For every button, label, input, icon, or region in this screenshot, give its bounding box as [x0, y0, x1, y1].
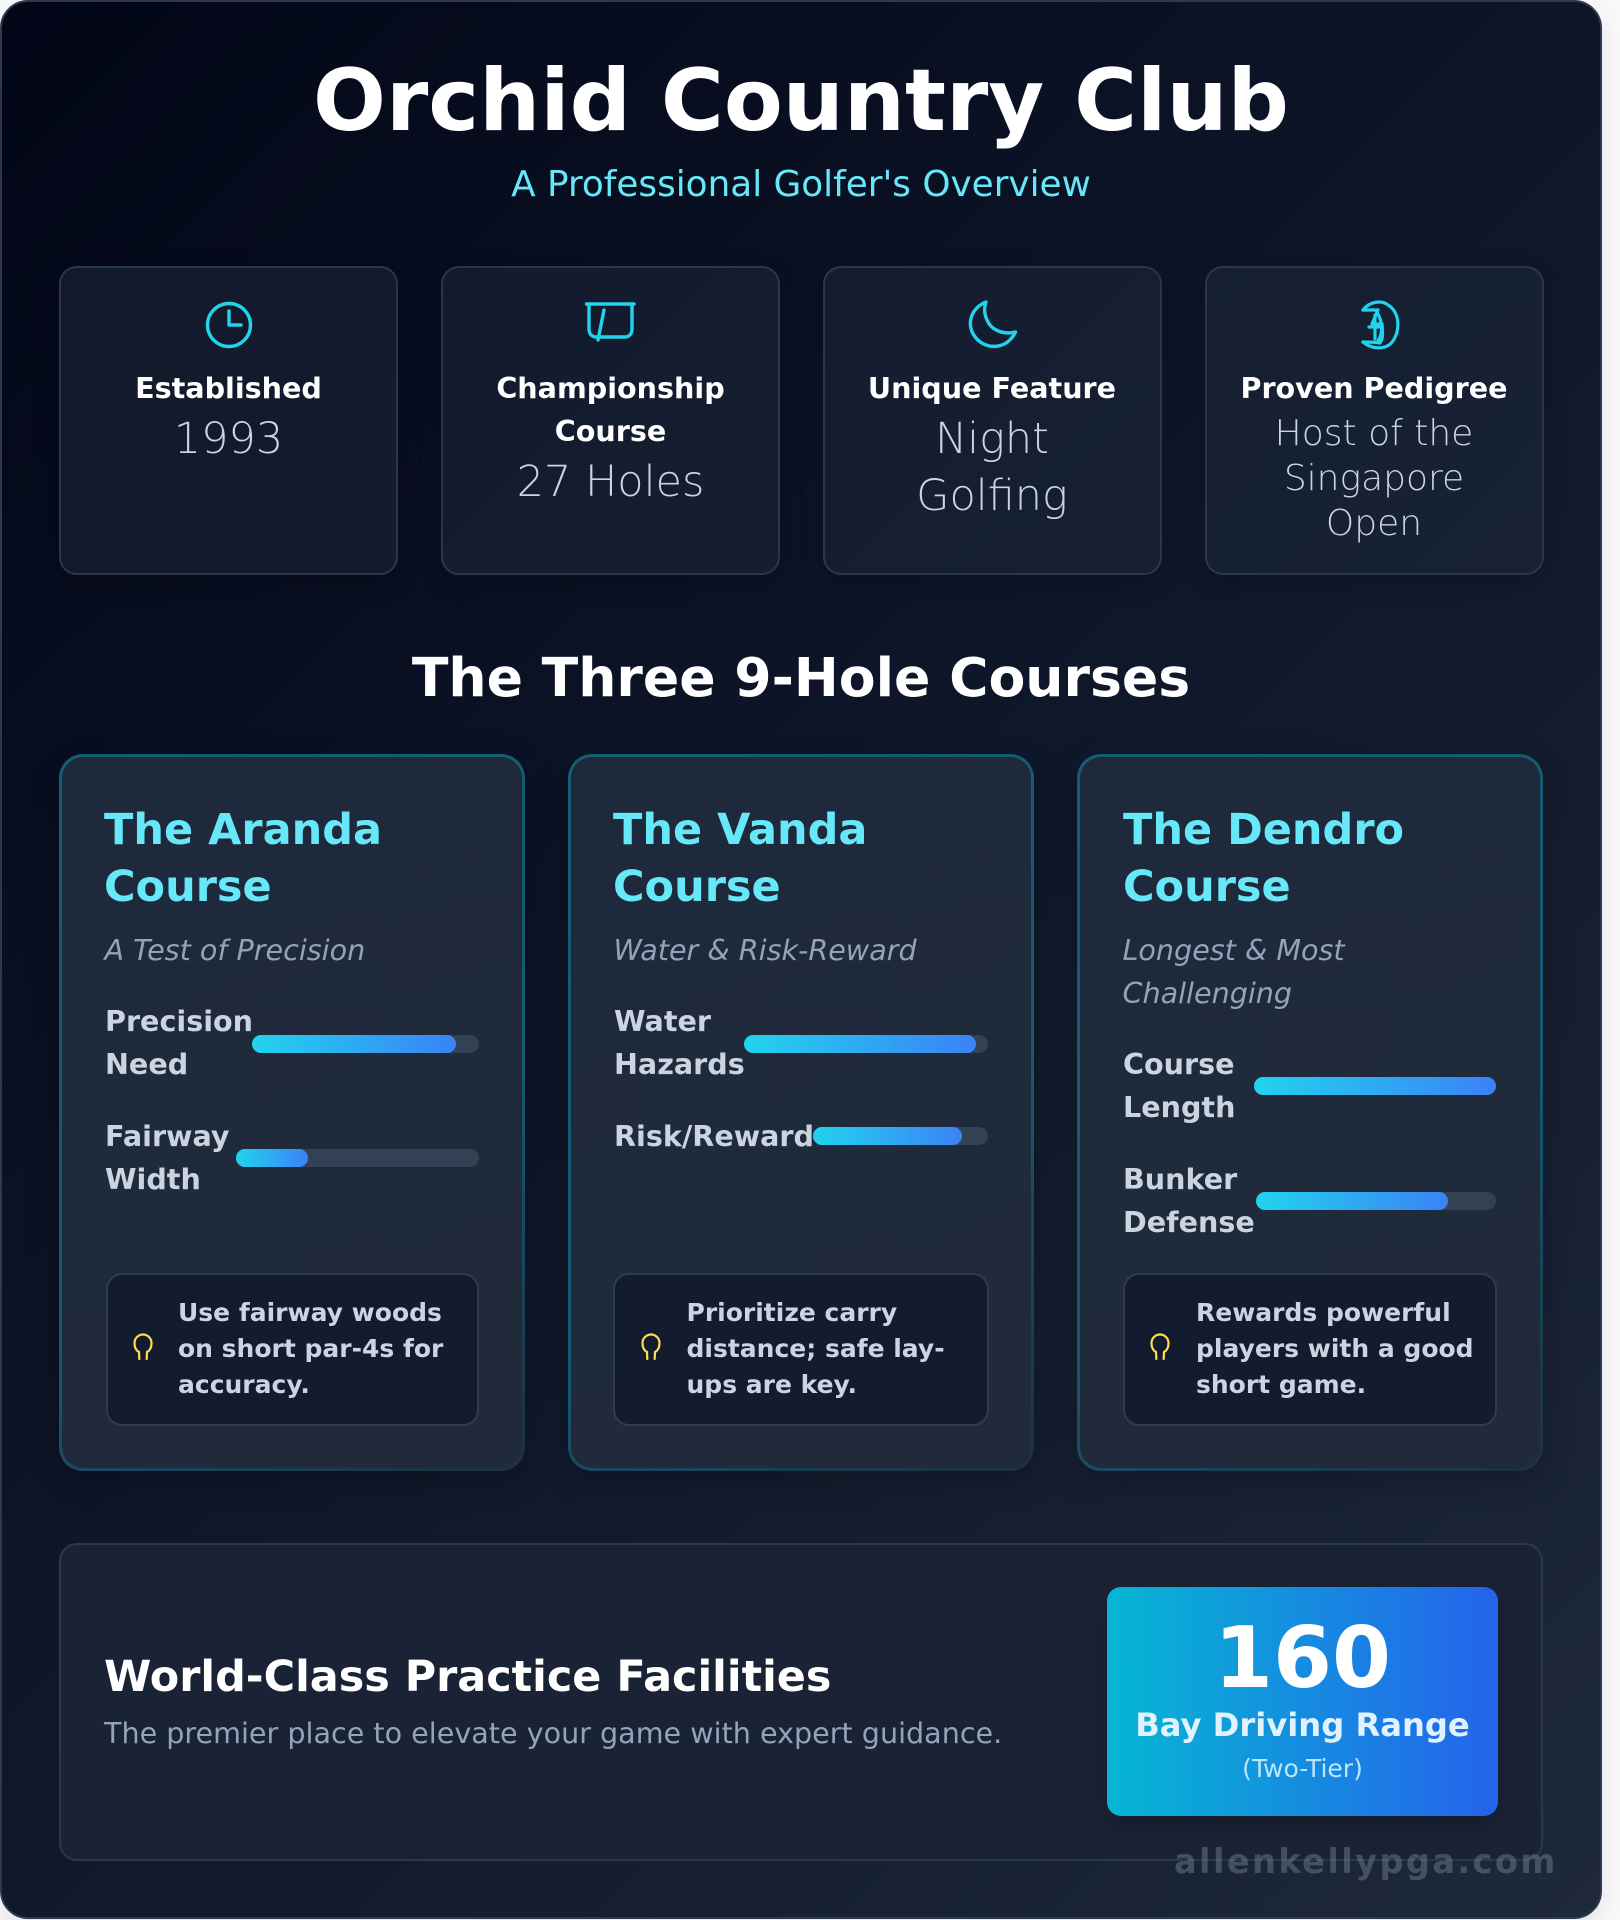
bar: water hazards 95%: [744, 1035, 988, 1053]
value: night golfing: [916, 414, 1068, 520]
facilities heading: World-Class Practice Facilities: [104, 1652, 831, 1702]
two-tier note: (Two-Tier): [1242, 1754, 1363, 1783]
tip text: short game.: [1196, 1370, 1366, 1398]
bar: precision need 90%: [252, 1035, 479, 1053]
icon: moon: [968, 300, 1018, 348]
label: championship course: Championship: [496, 371, 725, 405]
subtitle: A Professional Golfer's Overview: [511, 164, 1091, 204]
tip text: Rewards powerful: [1196, 1298, 1451, 1326]
value: night golfing: Golfing: [916, 470, 1068, 520]
bar: course length 100%: [1254, 1077, 1496, 1095]
bar label: risk reward: Risk/Reward: [614, 1119, 814, 1153]
bar label: bunker defense: [1123, 1162, 1255, 1238]
panel: established: [59, 266, 398, 575]
course title: Course: [613, 862, 781, 912]
bar label: water hazards: [614, 1004, 745, 1081]
course tagline: Longest & Most: [1122, 933, 1345, 967]
tip text: players with a good: [1196, 1334, 1474, 1362]
bar: bunker defense 80%: [1256, 1192, 1496, 1210]
bar label: precision need: Precision: [105, 1004, 253, 1038]
course title: Course: [1123, 862, 1291, 912]
course title: Course: [104, 862, 272, 912]
tip text: distance; safe lay-: [686, 1334, 945, 1362]
tip callout: [106, 1273, 479, 1426]
tip text: [686, 1298, 945, 1398]
course title: The Aranda: [104, 805, 382, 855]
course tagline: Water & Risk-Reward: [614, 933, 917, 967]
bar label: bunker defense: Defense: [1123, 1204, 1255, 1238]
facilities description: The premier place to elevate your game with expert guidance.: [104, 1716, 1002, 1750]
course title: [104, 805, 382, 912]
value: host of the singapore open: Open: [1326, 503, 1422, 544]
bar: fairway width 30%: [236, 1149, 479, 1167]
bar label: course length: Length: [1123, 1090, 1235, 1124]
course tagline: Challenging: [1122, 976, 1292, 1010]
title: Orchid Country Club: [313, 51, 1289, 151]
tip text: Use fairway woods: [178, 1298, 442, 1326]
label: championship course: Course: [555, 414, 666, 448]
tip callout: [1123, 1273, 1496, 1426]
tip text: Prioritize carry: [686, 1298, 897, 1326]
icon: bulb: [641, 1333, 661, 1360]
panel: aranda course: [59, 754, 525, 1471]
bar label: precision need: Need: [105, 1047, 188, 1081]
course title: [1123, 805, 1404, 912]
icon: pedigree emblem: [1361, 300, 1400, 350]
icon: golf trophy: [584, 302, 636, 342]
tip text: [1196, 1298, 1474, 1398]
panel: practice facilities: [59, 1543, 1543, 1861]
label: championship course: [496, 371, 725, 448]
bar label: course length: [1123, 1046, 1235, 1124]
watermark: allenkellypga.com: [1174, 1842, 1558, 1881]
value: host of the singapore open: Singapore: [1284, 458, 1464, 499]
panel: championship course: [441, 266, 780, 575]
panel: vanda course: [568, 754, 1034, 1471]
label: established: Established: [135, 371, 322, 405]
course title: The Vanda: [613, 805, 867, 855]
value: host of the singapore open: [1275, 413, 1473, 544]
number 160: 160: [1214, 1608, 1391, 1707]
range label: Bay Driving Range: [1135, 1706, 1470, 1744]
panel: proven pedigree: [1204, 266, 1544, 575]
icon: bulb: [133, 1333, 153, 1360]
stat tile: driving range: [1107, 1587, 1498, 1816]
section heading: The Three 9-Hole Courses: [412, 646, 1190, 708]
tip text: ups are key.: [686, 1370, 857, 1398]
label: proven pedigree: Proven Pedigree: [1240, 371, 1508, 405]
panel: dendro course: [1077, 754, 1543, 1471]
icon: clock: [206, 302, 252, 348]
bar label: course length: Course: [1123, 1046, 1234, 1080]
panel: unique feature: [822, 266, 1162, 575]
bar label: fairway width: Fairway: [105, 1119, 230, 1153]
value: 27 holes: 27 Holes: [517, 457, 704, 507]
value: host of the singapore open: Host of the: [1275, 413, 1473, 454]
tip text: on short par-4s for: [178, 1334, 443, 1362]
value: night golfing: Night: [935, 414, 1049, 464]
bar label: water hazards: Water: [614, 1004, 711, 1038]
bar label: fairway width: [105, 1119, 230, 1196]
bar label: precision need: [105, 1004, 253, 1081]
course title: The Dendro: [1123, 805, 1404, 855]
bar: risk reward 85%: [813, 1127, 988, 1145]
bar label: fairway width: Width: [105, 1162, 201, 1196]
course title: [613, 805, 867, 912]
tip text: [178, 1298, 444, 1398]
tip callout: [612, 1273, 988, 1426]
bar label: water hazards: Hazards: [614, 1047, 745, 1081]
label: unique feature: Unique Feature: [868, 371, 1116, 405]
course tagline: A Test of Precision: [104, 933, 365, 967]
bar label: bunker defense: Bunker: [1123, 1162, 1237, 1196]
course tagline: [1122, 933, 1346, 1010]
value: 1993: 1993: [174, 414, 283, 464]
tip text: accuracy.: [178, 1370, 310, 1398]
icon: bulb: [1150, 1333, 1170, 1360]
